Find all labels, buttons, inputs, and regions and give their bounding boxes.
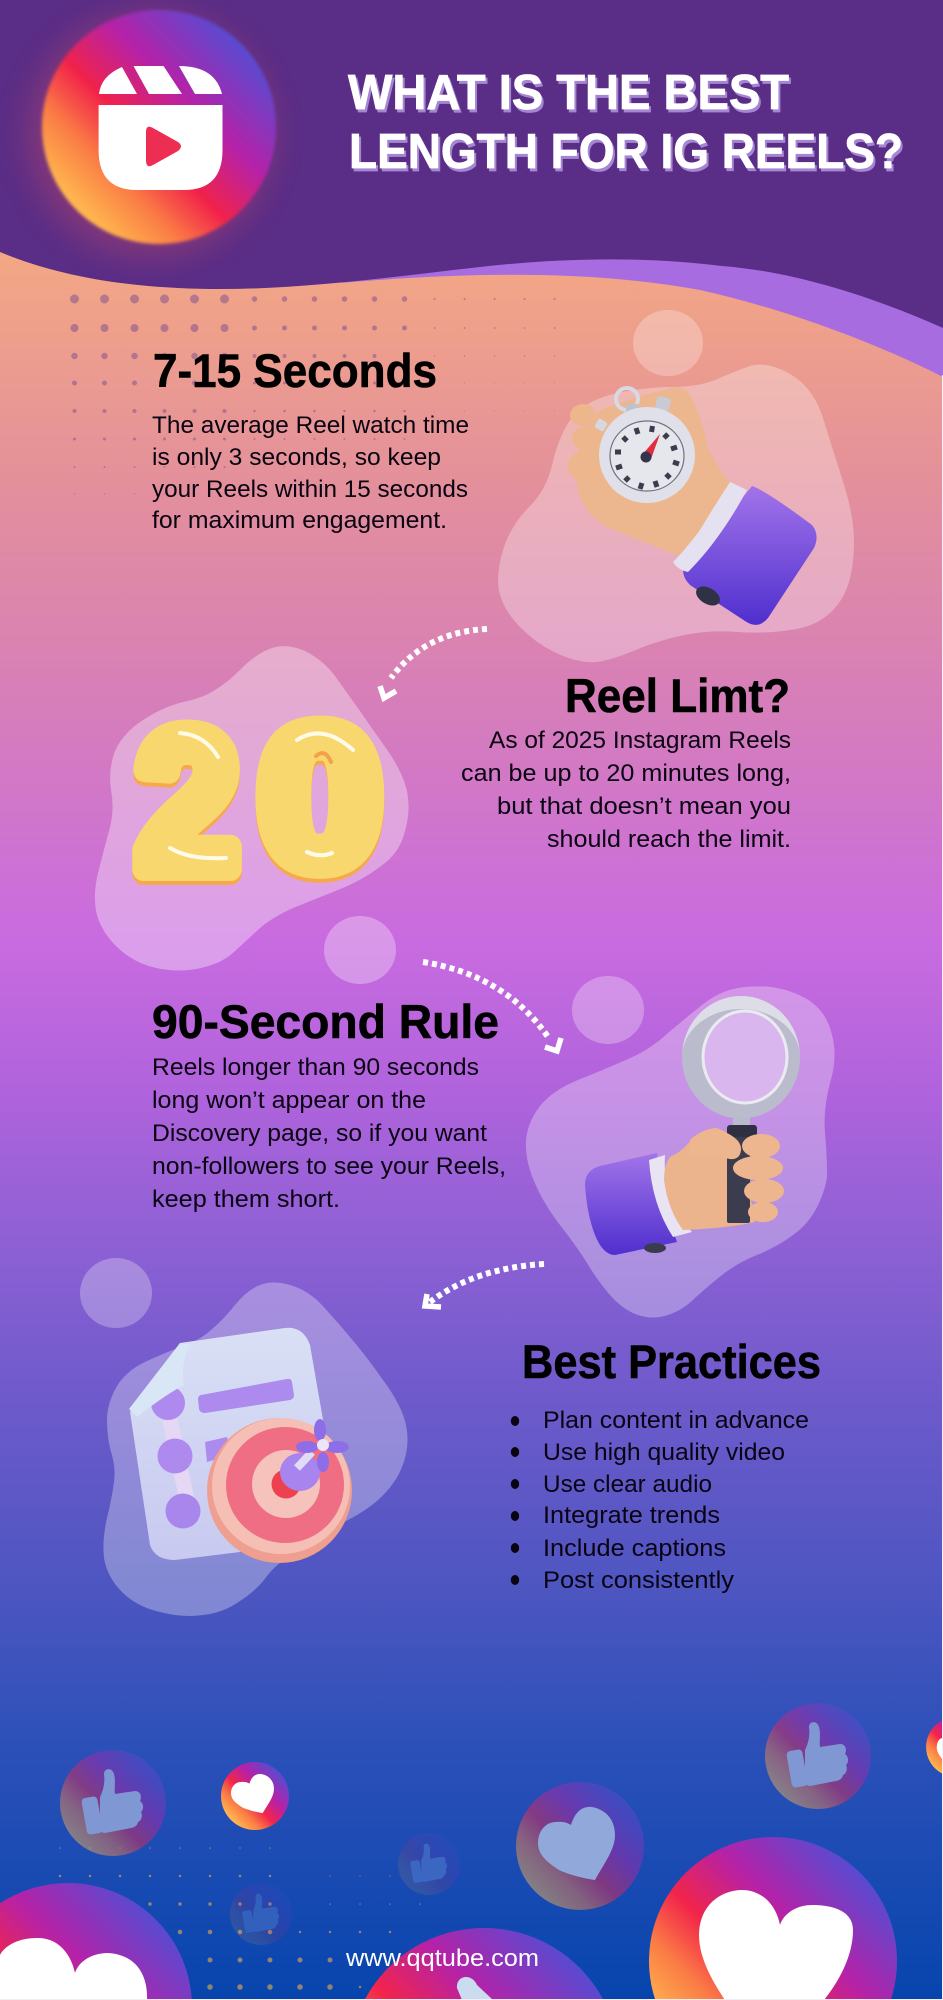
blob: document background xyxy=(103,1282,407,1616)
body text: can be up to 20 minutes long, xyxy=(461,760,791,787)
bullet list: Use high quality video xyxy=(543,1439,785,1466)
icon: yellow 3D number 20: 0 xyxy=(260,687,380,907)
icon: dim thumb bubble lower xyxy=(230,1883,292,1945)
body text: should reach the limit. xyxy=(547,826,791,853)
body text xyxy=(461,727,791,853)
icon: faded heart bubble xyxy=(516,1782,644,1910)
body text: your Reels within 15 seconds xyxy=(152,476,468,503)
heading: Reel Limt? xyxy=(565,669,790,722)
icon: faded thumb bubble right xyxy=(765,1703,871,1809)
icon: hand with stopwatch xyxy=(568,387,817,625)
icon: yellow 3D number 20: 2 xyxy=(137,695,238,915)
panel: best practices xyxy=(80,1258,821,1616)
body text: for maximum engagement. xyxy=(152,507,447,534)
arrow: stopwatch to 20 xyxy=(380,629,487,698)
icon: small heart bubble xyxy=(221,1762,289,1830)
bullet list xyxy=(511,1407,809,1594)
body text: non-followers to see your Reels, xyxy=(152,1153,506,1180)
dot pattern: top left xyxy=(74,299,560,494)
logo: reels icon in gradient circle xyxy=(28,10,276,257)
bullet list: Post consistently xyxy=(543,1567,735,1594)
icon: yellow 3D number 20: 2 xyxy=(137,691,238,911)
body text: keep them short. xyxy=(152,1186,340,1213)
bullet list: Plan content in advance xyxy=(543,1407,809,1434)
title: LENGTH FOR IG REELS? xyxy=(349,125,903,179)
icon: document with target xyxy=(129,1328,352,1563)
body text: but that doesn’t mean you xyxy=(497,793,791,820)
blob: stopwatch background xyxy=(498,365,854,662)
body text: long won’t appear on the xyxy=(152,1087,426,1114)
icon: thumb bubble bottom centre xyxy=(365,1928,603,2000)
body text: As of 2025 Instagram Reels xyxy=(489,727,791,754)
icon: heart bubble at right edge xyxy=(926,1720,943,1774)
body text: is only 3 seconds, so keep xyxy=(152,444,441,471)
icon: hand with magnifying glass xyxy=(585,996,800,1255)
icon: faded thumb bubble left xyxy=(60,1750,166,1856)
arrow: magnifier to target xyxy=(425,1264,544,1307)
panel: 7-15 seconds xyxy=(152,310,854,662)
bullet list: Integrate trends xyxy=(543,1502,720,1529)
icon: large heart bubble right xyxy=(649,1837,897,2000)
bullet list: Use clear audio xyxy=(543,1471,712,1498)
icon: play triangle xyxy=(146,127,181,166)
heading: 90-Second Rule xyxy=(152,995,499,1048)
title: WHAT IS THE BEST xyxy=(348,66,789,120)
blob: small circle xyxy=(633,310,703,376)
panel: 90-second rule xyxy=(152,976,835,1318)
icon: large heart bubble left xyxy=(0,1883,192,2000)
body text xyxy=(152,412,469,534)
header wave: dark purple banner xyxy=(0,0,943,328)
blob: small circle xyxy=(80,1258,152,1328)
bullet list: Include captions xyxy=(543,1535,726,1562)
icon: yellow 3D number 20: 0 xyxy=(260,691,380,911)
icon: clapper top xyxy=(99,66,222,94)
website url: www.qqtube.com xyxy=(345,1945,539,1972)
body text: The average Reel watch time xyxy=(152,412,469,439)
body text: Reels longer than 90 seconds xyxy=(152,1054,479,1081)
title xyxy=(348,66,903,179)
body text xyxy=(152,1054,506,1213)
icon: yellow 3D number 20 xyxy=(137,687,380,915)
blob: magnifier background xyxy=(526,986,835,1318)
panel: reel limit xyxy=(95,646,791,984)
icon: dim thumb bubble centre xyxy=(398,1833,460,1895)
arrow: 20 to magnifier xyxy=(423,962,561,1051)
dot pattern: bottom left xyxy=(60,1848,430,1987)
blob: small circle xyxy=(324,916,396,984)
blob: small circle xyxy=(572,976,644,1044)
blob: 20 background xyxy=(95,646,409,970)
body text: Discovery page, so if you want xyxy=(152,1120,487,1147)
header wave: light purple band xyxy=(340,230,943,377)
heading: Best Practices xyxy=(522,1335,821,1388)
icon: clapper body xyxy=(99,105,222,190)
heading: 7-15 Seconds xyxy=(153,344,437,397)
